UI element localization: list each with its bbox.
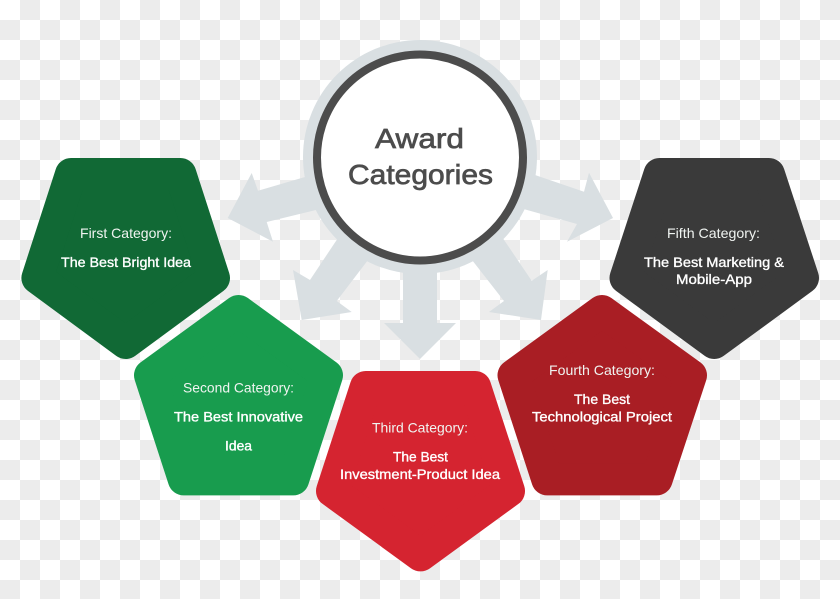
outer light ring <box>303 40 537 274</box>
award name: The Best Marketing & <box>644 254 785 270</box>
category label: Fourth Category: <box>549 362 655 378</box>
panel: first category <box>37 174 214 343</box>
pentagon <box>332 387 509 555</box>
arrow: to second category <box>293 238 368 320</box>
category label: Second Category: <box>183 380 294 396</box>
award name: Idea <box>225 438 252 454</box>
panel: fourth category <box>514 311 691 479</box>
arrow: to third category <box>384 260 456 359</box>
panel: third category <box>332 387 509 555</box>
heading: Award <box>375 123 464 154</box>
panel: second category <box>150 311 327 479</box>
pentagon <box>37 174 214 343</box>
heading: Categories <box>348 159 493 190</box>
central circle: Award Categories <box>303 40 537 274</box>
category label: Fifth Category: <box>667 225 760 241</box>
category label: First Category: <box>80 225 172 241</box>
award name: The Best Innovative <box>174 409 303 425</box>
category label: Third Category: <box>372 420 468 436</box>
arrow: to first category <box>228 173 320 242</box>
award name: The Best Bright Idea <box>61 254 191 270</box>
award name: Investment-Product Idea <box>340 466 500 482</box>
award name: Technological Project <box>532 409 672 425</box>
arrows: radiating from the central circle <box>228 173 613 359</box>
arrow: to fifth category <box>520 173 613 242</box>
award name: The Best <box>393 449 448 465</box>
pentagon <box>514 311 691 479</box>
award name: Mobile-App <box>676 271 752 287</box>
dark ring with white centre <box>317 54 523 260</box>
pentagon <box>626 174 803 343</box>
arrow: to fourth category <box>472 238 548 320</box>
award name: The Best <box>574 391 630 407</box>
pentagon <box>150 311 327 479</box>
panel: fifth category <box>626 174 803 343</box>
